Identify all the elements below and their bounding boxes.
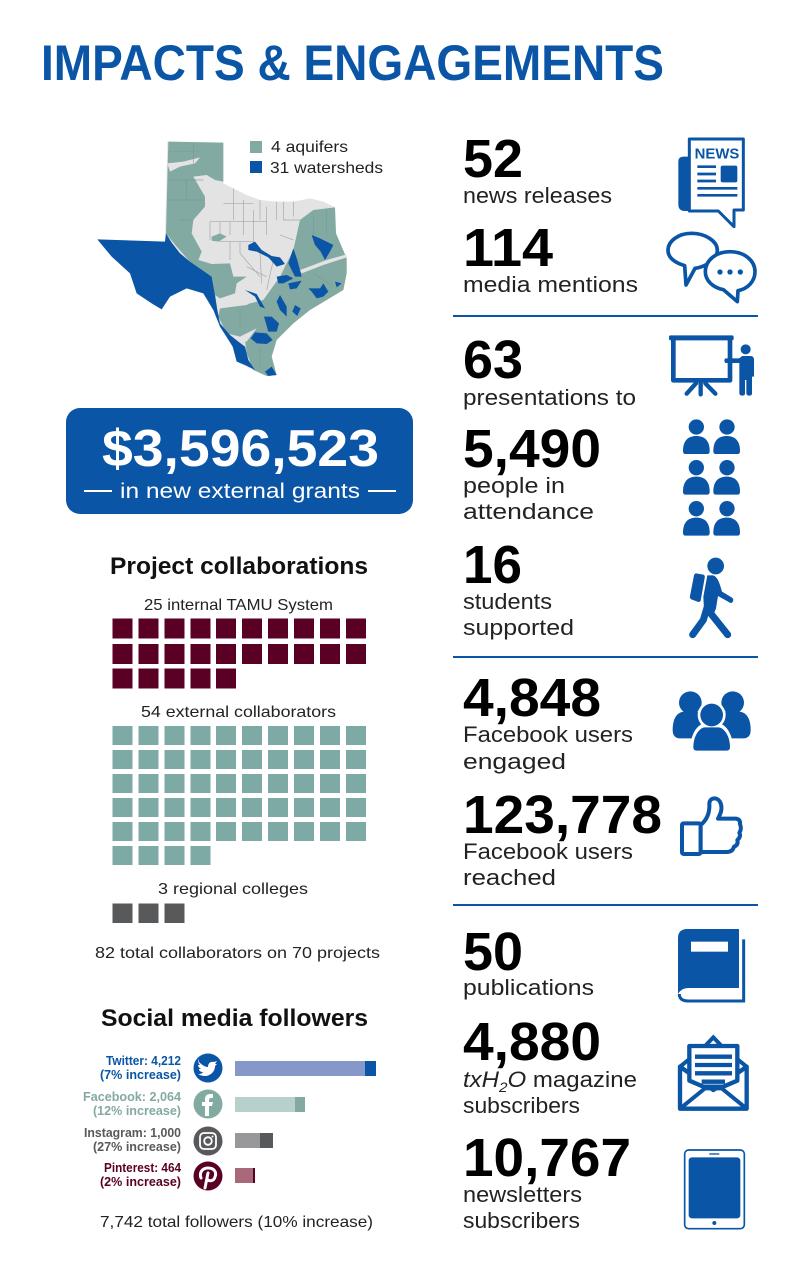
icon: walking student [690,558,733,635]
stat: publications: publications [463,975,594,1000]
waffle: 3 regional colleges [112,881,308,923]
icon: newspaper: NEWS [695,146,740,162]
stat: media mentions: 114 [463,218,553,278]
waffle: 54 external: 54 external collaborators [141,704,336,721]
icon: tablet [685,1150,744,1229]
stat: newsletter subscribers: 10,767 [463,1128,631,1188]
heading: project collaborations: Project collaborations [110,553,368,580]
icon: book [678,929,744,1001]
followers total: 7,742 total followers (10% increase) [100,1214,373,1231]
stat: magazine subscribers: subscribers [463,1093,580,1118]
stat: newsletter subscribers: subscribers [463,1208,580,1233]
stat: people in attendance: people in [463,473,565,498]
icon: newspaper [678,139,743,227]
stat: people in attendance: attendance [463,499,594,524]
stat: magazine subscribers: magazine [532,1067,628,1092]
stat: people in attendance [463,419,601,524]
stat: students supported: 16 [463,535,522,595]
stat: presentations [463,330,636,410]
divider [453,315,758,317]
stat: people in attendance: 5,490 [463,419,601,479]
social row: facebook: Facebook: 2,064 [83,1090,181,1104]
stat: facebook engaged: engaged [463,749,566,774]
map of Texas [97,142,347,376]
social row: pinterest [100,1161,255,1190]
stat: magazine subscribers: txH [463,1067,526,1095]
icon: audience [683,419,740,536]
social row: instagram: (27% increase) [93,1140,181,1154]
stat: facebook reached: Facebook users [463,839,633,864]
map legend [250,139,383,177]
stat: presentations: 63 [463,330,523,390]
grants callout [66,408,413,514]
social row: twitter: (7% increase) [100,1068,181,1082]
stat: media mentions: media mentions [463,272,638,297]
stat: students supported: supported [463,615,574,640]
aquifer regions [166,142,347,376]
icon: presenter [669,335,754,396]
waffle: 25 internal: 25 internal TAMU System [144,597,333,614]
social row: facebook: (12% increase) [93,1104,181,1118]
stat: students supported [463,535,574,640]
map legend: 4 aquifers [271,139,348,156]
social row: twitter: Twitter: 4,212 [106,1054,181,1068]
stat: publications: 50 [463,922,523,982]
collaborators total: 82 total collaborators on 70 projects [95,945,380,962]
waffle: 25 internal [112,597,366,688]
map legend: 31 watersheds [270,160,383,177]
social row: facebook [83,1090,305,1118]
icon: open envelope [680,1037,747,1109]
stat: magazine subscribers [463,1012,637,1118]
social row: instagram [84,1126,273,1156]
social row: instagram: Instagram: 1,000 [84,1126,181,1140]
stat: presentations: presentations to [463,385,636,410]
social row: pinterest: (2% increase) [100,1175,181,1189]
stat: facebook engaged: Facebook users [463,722,633,747]
stat: students supported: students [463,589,552,614]
stat: magazine subscribers: O [508,1067,526,1092]
icon: thumbs up [682,798,741,854]
stat: facebook reached [463,785,662,890]
stat: facebook reached: reached [463,865,556,890]
stat: newsletter subscribers [463,1128,631,1233]
divider [453,656,758,658]
stat: publications [463,922,594,1000]
icon: chat bubbles [668,233,755,302]
stat: news releases [463,129,612,208]
waffle: 3 regional colleges: 3 regional colleges [158,881,308,898]
title: IMPACTS & ENGAGEMENTS [41,35,664,91]
stat: magazine subscribers: 2 [498,1079,508,1095]
grants callout: in new external grants [120,480,360,503]
social row: twitter [100,1054,376,1082]
stat: news releases: 52 [463,129,523,189]
waffle: 54 external [112,704,366,865]
social row: pinterest: Pinterest: 464 [104,1161,181,1175]
stat: news releases: news releases [463,183,612,208]
stat: media mentions [463,218,638,297]
grants callout: $3,596,523 [102,420,379,478]
stat: newsletter subscribers: newsletters [463,1182,582,1207]
divider [453,904,758,906]
heading: social media followers: Social media followers [101,1005,368,1032]
watershed regions [97,233,342,376]
stat: facebook reached: 123,778 [463,785,662,845]
stat: magazine subscribers: 4,880 [463,1012,601,1072]
stat: facebook engaged: 4,848 [463,668,601,728]
stat: facebook engaged [463,668,633,774]
icon: user group [673,691,751,751]
